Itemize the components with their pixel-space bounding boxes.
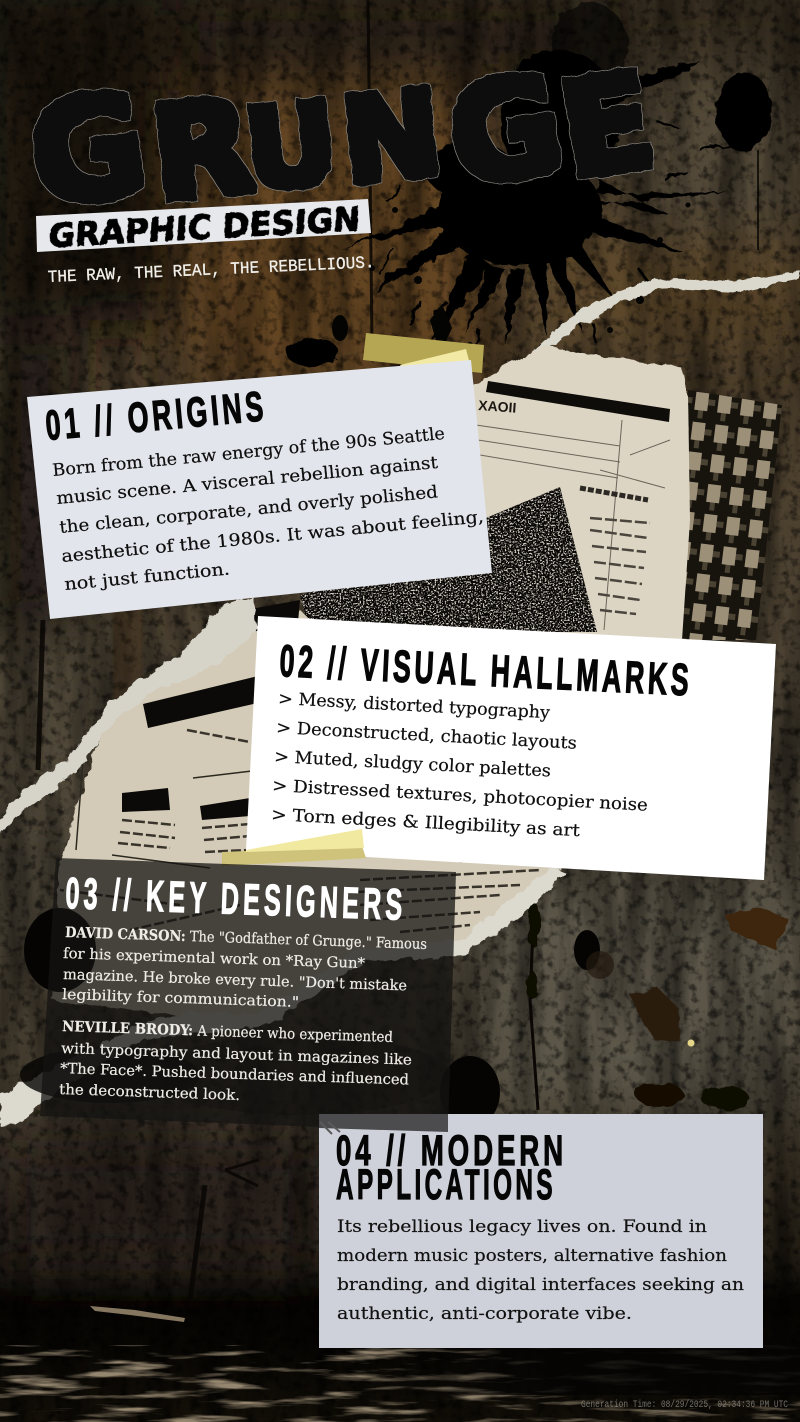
body: Neville Brody: [59, 1018, 412, 1104]
tagline: THE RAW, THE REAL, THE REBELLIOUS.: [47, 254, 375, 288]
subtitle strip: Graphic Design: GRAPHIC DESIGN: [48, 199, 361, 255]
icon: paper masthead: [476, 381, 670, 630]
heading: origins: 01 // ORIGINS: [44, 382, 269, 449]
body: Neville Brody: the deconstructed look.: [59, 1082, 240, 1104]
icon: photocopier noise block: [300, 480, 600, 635]
title: GRUNGE: E: [551, 43, 664, 210]
body: David Carson: magazine. He broke every rule. "Don't mistake: [63, 967, 407, 994]
body: modern applications: authentic, anti-corporate vibe.: [337, 1304, 632, 1324]
tape: hallmarks panel: [222, 829, 366, 866]
left torn paper edge: [0, 596, 258, 838]
body: David Carson: [62, 924, 427, 1011]
body: origins: [52, 424, 485, 595]
body: origins: Born from the raw energy of the 90s Seattle: [52, 424, 446, 481]
body: Neville Brody: with typography and layout in magazines like: [61, 1041, 412, 1069]
list: hallmarks: > Muted, sludgy color palettes: [274, 747, 551, 781]
panel: 01 origins: [27, 360, 492, 619]
list: hallmarks: > Torn edges & Illegibility as art: [271, 805, 581, 841]
icon: plaid print: [682, 390, 782, 640]
title: GRUNGE: G: [20, 62, 157, 240]
title: GRUNGE: G: [438, 45, 573, 219]
title: GRUNGE: R: [144, 69, 260, 231]
body: modern applications: [337, 1217, 744, 1324]
lower ink blots: [20, 903, 790, 1128]
icon: paper masthead: XAOII: [478, 397, 517, 416]
title: GRUNGE: N: [336, 63, 448, 211]
body: origins: the clean, corporate, and overly polished: [59, 482, 439, 538]
list: hallmarks: > Deconstructed, chaotic layouts: [276, 718, 577, 754]
body: modern applications: branding, and digital interfaces seeking an: [337, 1275, 744, 1295]
torn collage paper: lower: [52, 600, 560, 1017]
panel: 04 modern applications: APPLICATIONS: [336, 1161, 556, 1209]
body: David Carson: for his experimental work on *Ray Gun*: [63, 946, 366, 972]
body: origins: music scene. A visceral rebellion against: [56, 453, 439, 509]
body: modern applications: Its rebellious legacy lives on. Found in: [337, 1217, 707, 1237]
panel: 03 key designers: [40, 858, 456, 1132]
body: origins: aesthetic of the 1980s. It was about feeling,: [61, 507, 485, 567]
list: hallmarks: > Messy, distorted typography: [278, 689, 551, 723]
lower torn paper edge: [0, 868, 565, 1126]
list: hallmarks: [271, 689, 648, 841]
body: David Carson: legibility for communication.": [62, 987, 299, 1011]
body: Neville Brody: *The Face*. Pushed boundaries and influenced: [60, 1061, 409, 1089]
body: origins: not just function.: [64, 559, 231, 595]
torn collage paper: upper: [300, 347, 782, 650]
body: David Carson: DAVID CARSON: The "Godfather of Grunge." Famous: [65, 924, 427, 953]
heading: key designers: 03 // KEY DESIGNERS: [65, 869, 407, 930]
tape: origins panel: [363, 333, 484, 378]
title: GRUNGE: U: [239, 78, 343, 217]
body: Neville Brody: NEVILLE BRODY: A pioneer who experimented: [62, 1018, 393, 1046]
upper torn paper edge: [525, 270, 800, 366]
heading: modern applications: 04 // MODERN: [336, 1127, 567, 1175]
ink splatter: large black blot behind title: [286, 3, 772, 367]
panel: 02 visual hallmarks: [246, 616, 776, 880]
tape: modern applications panel: [319, 1114, 448, 1134]
panel: 04 modern applications: [319, 1114, 763, 1348]
list: hallmarks: > Distressed textures, photocopier noise: [272, 776, 648, 816]
floor texture: [0, 1306, 800, 1422]
body: modern applications: modern music posters, alternative fashion: [337, 1246, 727, 1266]
